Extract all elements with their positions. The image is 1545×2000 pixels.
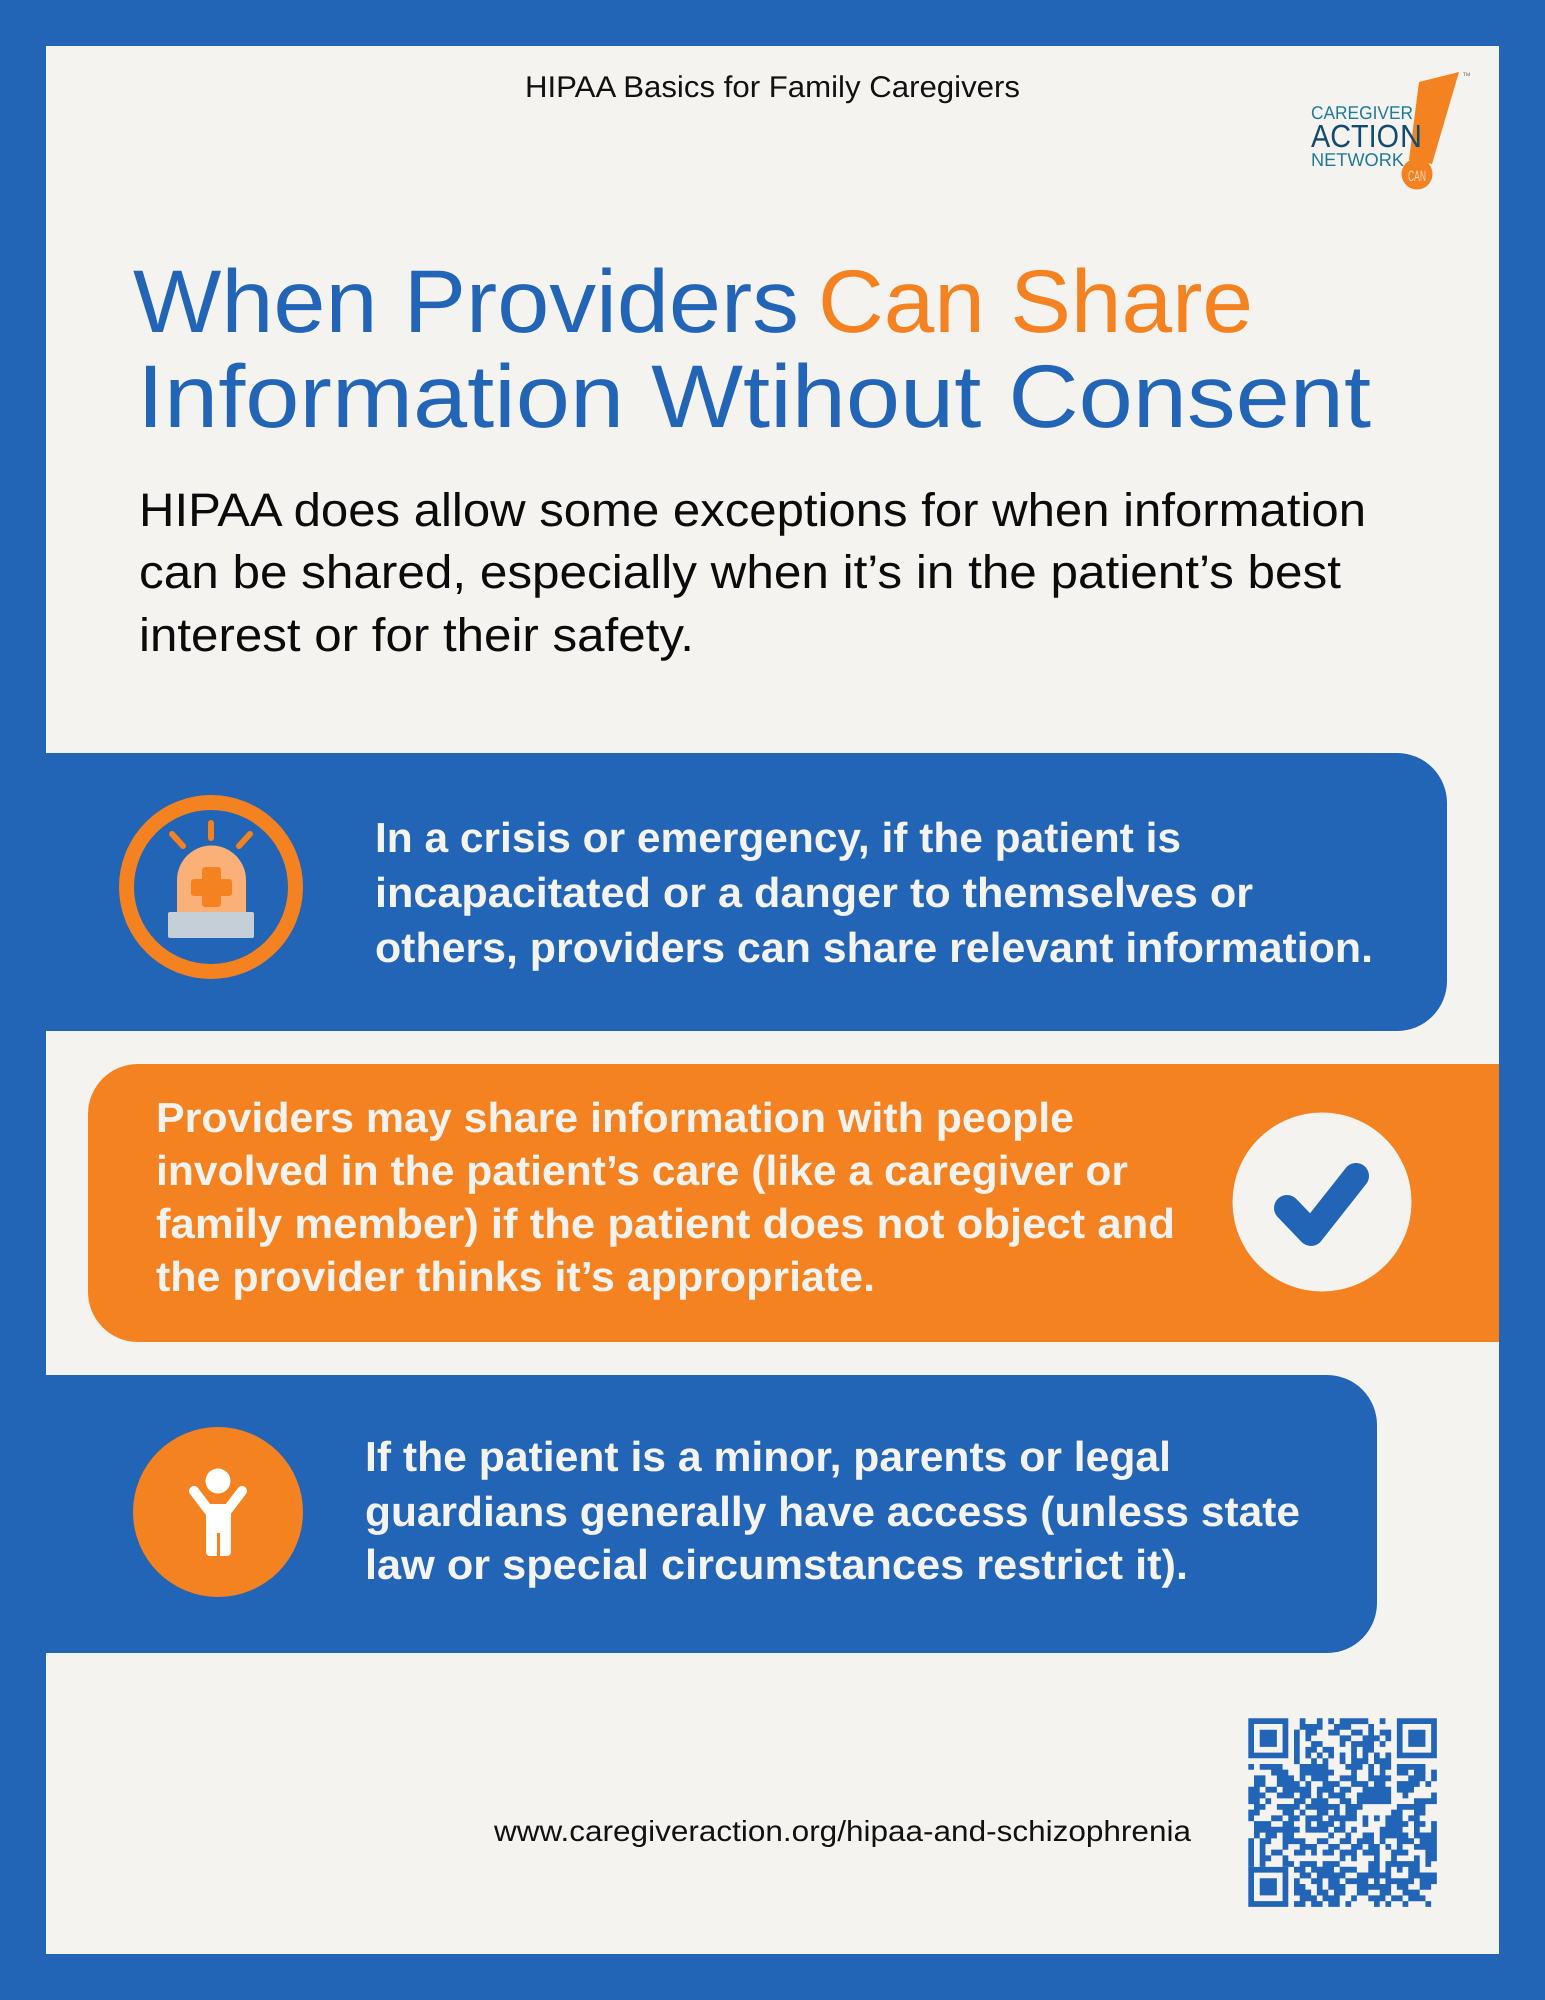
- logo: Caregiver Action Network: ACTIO: [1311, 118, 1399, 154]
- logo: Caregiver Action Network: CAN: [1408, 168, 1426, 185]
- intro paragraph: interest or for their safety.: [139, 608, 694, 661]
- panel: crisis or emergency: [46, 753, 1447, 1031]
- panel text: minors: If the patient is a minor, parents or legal: [365, 1433, 1171, 1480]
- panel text: minors: guardians generally have access (unless state: [365, 1488, 1300, 1535]
- footer URL: www.caregiveraction.org/hipaa-and-schizophrenia: [493, 1816, 1192, 1848]
- panel text: caregivers: family member) if the patient does not object and: [156, 1200, 1175, 1247]
- panel text: crisis: [375, 814, 1373, 971]
- title: Information Wtihout Consent: [137, 346, 1371, 446]
- intro paragraph: [139, 483, 1366, 661]
- panel text: minors: [365, 1433, 1300, 1588]
- title: [133, 251, 1371, 446]
- intro paragraph: HIPAA does allow some exceptions for when information: [139, 483, 1366, 536]
- logo: Caregiver Action Network: [1311, 72, 1470, 190]
- icon: check mark: [1232, 1112, 1412, 1292]
- panel text: crisis: In a crisis or emergency, if the patient is: [375, 814, 1181, 861]
- icon: emergency siren: [126, 802, 296, 972]
- panel text: caregivers: [156, 1094, 1175, 1300]
- header text: HIPAA Basics for Family Caregivers: [525, 71, 1020, 104]
- icon: child: [133, 1427, 303, 1597]
- panel text: caregivers: involved in the patient’s care (like a caregiver or: [156, 1147, 1128, 1194]
- panel text: crisis: others, providers can share relevant information.: [375, 924, 1373, 971]
- panel text: crisis: incapacitated or a danger to themselves or: [375, 869, 1253, 916]
- logo: Caregiver Action Network: NETWORK: [1311, 149, 1405, 170]
- panel: people involved in care: [88, 1064, 1499, 1342]
- logo: Caregiver Action Network: CAREGIVER: [1311, 102, 1413, 123]
- panel text: caregivers: the provider thinks it’s appropriate.: [156, 1253, 875, 1300]
- title: Can Share: [818, 251, 1253, 351]
- panel: minors: [46, 1375, 1377, 1653]
- panel text: minors: law or special circumstances restrict it).: [365, 1541, 1188, 1588]
- logo: Caregiver Action Network: N: [1400, 118, 1422, 154]
- logo: Caregiver Action Network: TM: [1463, 72, 1470, 78]
- title: When Providers: [133, 251, 799, 351]
- QR code: [1248, 1718, 1437, 1907]
- intro paragraph: can be shared, especially when it’s in the patient’s best: [139, 545, 1341, 598]
- panel text: caregivers: Providers may share information with people: [156, 1094, 1074, 1141]
